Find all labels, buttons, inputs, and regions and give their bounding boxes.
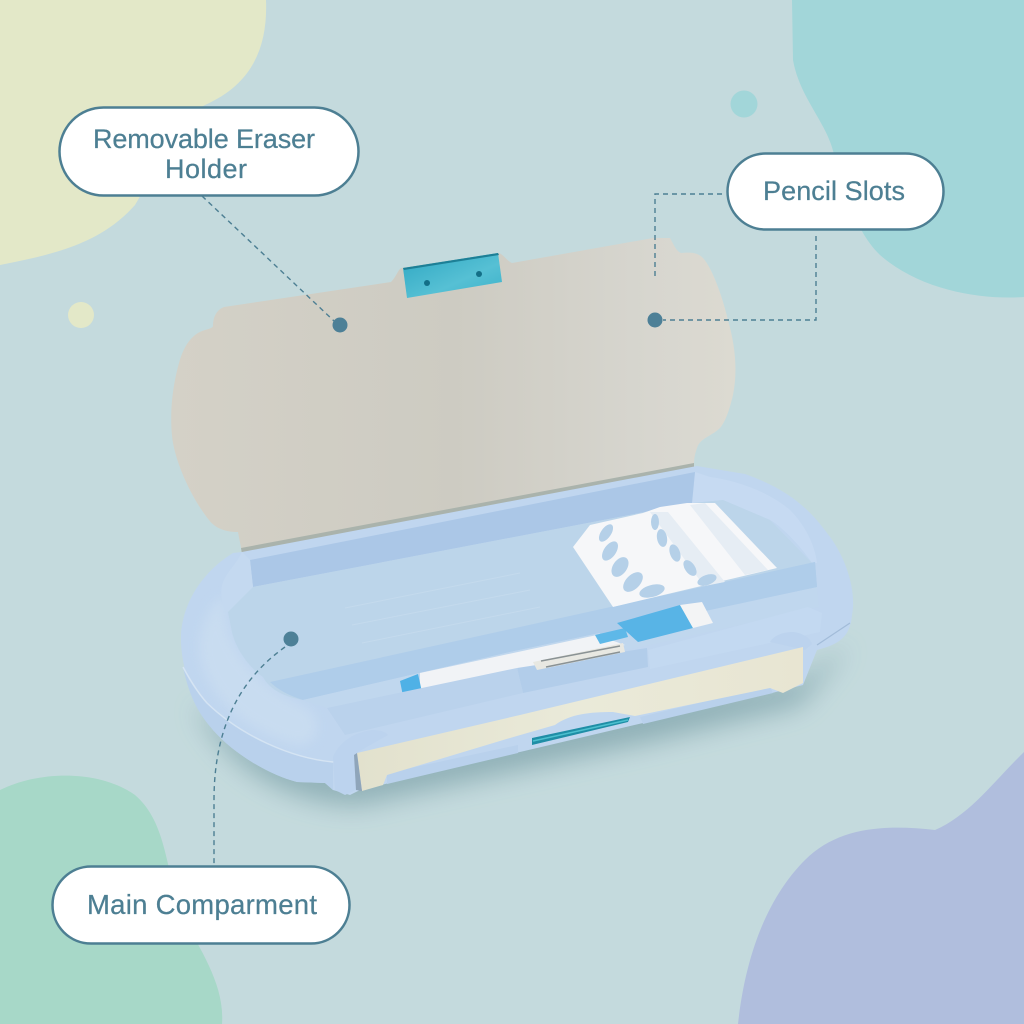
front latch [532, 717, 630, 745]
blob: purple bottom right [738, 752, 1024, 1024]
channel floor [303, 587, 819, 708]
floor ribs [345, 573, 540, 643]
blue bar under strap left [387, 745, 518, 784]
front wall block left [517, 648, 648, 693]
marker: pencil slots [648, 312, 662, 328]
product: pencil case [171, 238, 853, 805]
blue bar under strap right [640, 686, 773, 724]
clip screws [424, 280, 430, 286]
slot holes [596, 514, 718, 600]
hinge strip [241, 463, 694, 560]
dot: yellow [68, 302, 94, 328]
front wall block right [648, 607, 822, 669]
marker: main compartment [284, 632, 298, 646]
blob: green bottom left [0, 776, 222, 1024]
callout: Main Comparment [52, 866, 350, 944]
callout: Main Comparment: Main Comparment [87, 889, 317, 920]
right seam [817, 623, 850, 645]
pen connector [595, 628, 628, 644]
right latch bump [770, 632, 812, 650]
lower rim shade [183, 667, 333, 790]
connector lines [202, 194, 816, 865]
blob: yellow top left [0, 0, 266, 265]
left latch bump [333, 730, 388, 795]
rim highlight [200, 597, 317, 745]
strap left edge [354, 753, 362, 791]
divider face over slots [600, 562, 817, 634]
slot shading [650, 503, 768, 586]
clip top edge [403, 253, 499, 270]
rim seam [183, 667, 352, 762]
slider label [533, 643, 625, 670]
dot: teal [730, 90, 758, 118]
back wall [250, 472, 695, 587]
case body [181, 466, 853, 795]
right raised rim [692, 472, 817, 563]
divider face [270, 562, 817, 700]
blob: teal top right [792, 0, 1024, 298]
case shadow [195, 645, 850, 805]
lid clip [403, 253, 502, 298]
callout: Removable Eraser Holder: Holder [165, 154, 247, 184]
lid [171, 238, 735, 558]
callout: Removable Eraser Holder [60, 108, 358, 196]
pen barrel [420, 635, 625, 692]
eraser holder [617, 605, 693, 642]
pen tip [400, 674, 422, 696]
pencil slots [573, 503, 777, 607]
front wall left [327, 668, 523, 735]
compartment floor [228, 500, 812, 700]
callout: Pencil Slots: Pencil Slots [763, 176, 905, 206]
callout: Removable Eraser Holder: Removable Eraser [93, 124, 315, 154]
marker: eraser holder [332, 318, 348, 332]
left inner corner piece [221, 552, 253, 612]
front strap [357, 647, 803, 791]
callout: Pencil Slots [728, 154, 944, 230]
eraser [680, 602, 713, 628]
